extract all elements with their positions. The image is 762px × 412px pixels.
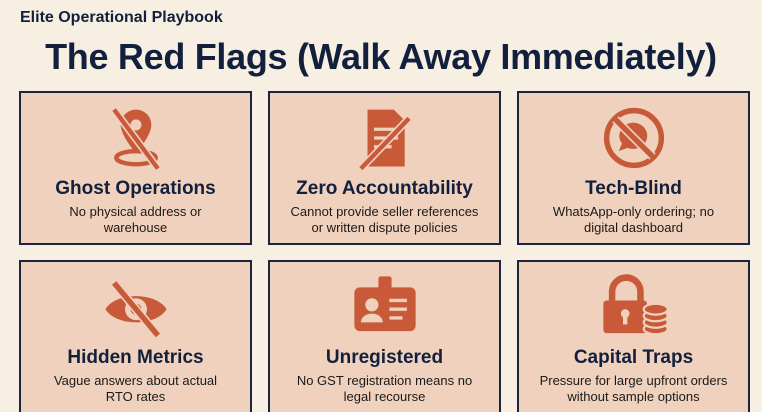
panel: hidden metrics — [19, 260, 252, 412]
description — [69, 204, 202, 235]
icon: padlock with coins — [603, 274, 667, 334]
description: Cannot provide seller references — [291, 204, 478, 219]
description — [297, 373, 472, 404]
panel: tech-blind — [517, 91, 750, 245]
description: Vague answers about actual — [54, 373, 217, 388]
icon: id badge — [354, 276, 416, 332]
description: No GST registration means no — [297, 373, 472, 388]
icon: crossed location pin — [112, 108, 160, 170]
icon: crossed document — [359, 110, 411, 170]
heading: Unregistered — [326, 347, 443, 368]
icon: crossed eye — [105, 281, 167, 338]
heading: Tech-Blind — [585, 178, 682, 199]
icon: no chat — [604, 108, 664, 168]
description — [553, 204, 714, 235]
description: legal recourse — [344, 389, 425, 404]
description: RTO rates — [106, 389, 165, 404]
heading: Ghost Operations — [55, 178, 216, 199]
subtitle: Elite Operational Playbook — [20, 9, 223, 26]
heading: Hidden Metrics — [67, 347, 204, 368]
description: or written dispute policies — [312, 220, 457, 235]
heading: Capital Traps — [574, 347, 693, 368]
panel: ghost operations — [19, 91, 252, 245]
description: No physical address or — [69, 204, 202, 219]
description — [540, 373, 727, 404]
description: Pressure for large upfront orders — [540, 373, 727, 388]
panel: capital traps — [517, 260, 750, 412]
title: The Red Flags (Walk Away Immediately) — [45, 36, 717, 77]
panel: unregistered — [268, 260, 501, 412]
panel: zero accountability — [268, 91, 501, 245]
description: WhatsApp-only ordering; no — [553, 204, 714, 219]
heading: Zero Accountability — [296, 178, 473, 199]
description: digital dashboard — [584, 220, 683, 235]
description — [291, 204, 478, 235]
description — [54, 373, 217, 404]
description: without sample options — [567, 389, 700, 404]
description: warehouse — [104, 220, 167, 235]
